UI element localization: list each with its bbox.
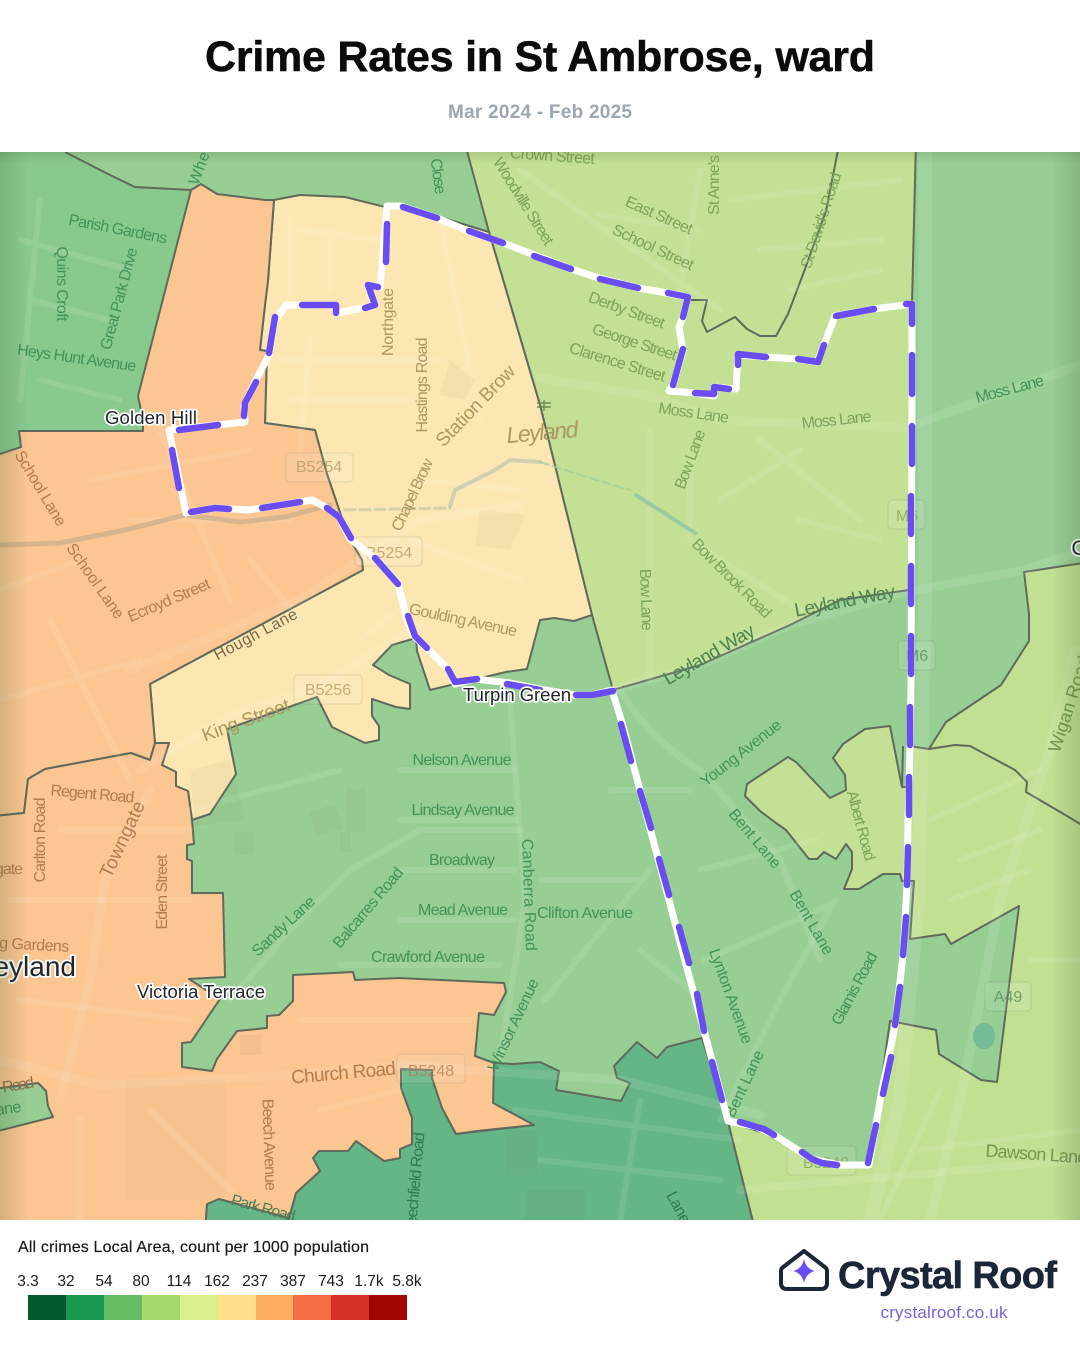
street labels: Station Brow	[432, 361, 520, 451]
street labels: g Gardens	[0, 935, 70, 956]
street labels: Park Road	[229, 1192, 297, 1225]
street labels: Canberra Road	[518, 839, 539, 951]
street labels: Leyland	[505, 416, 580, 448]
zone: Albert Road light green	[745, 726, 909, 889]
street labels: Moss Lane	[974, 372, 1046, 407]
street labels: Eden Street	[154, 854, 171, 930]
street labels: Parish Gardens	[67, 212, 169, 247]
zone: north-west darker green	[0, 140, 191, 456]
street labels: Road	[1, 1074, 35, 1097]
boundary: M6 stub beside Albert Road	[902, 746, 903, 787]
street labels: Nelson Avenue	[412, 752, 512, 769]
street labels: Crawford Avenue	[371, 949, 485, 966]
zone: north orange	[0, 184, 363, 816]
road shields: B5248	[803, 1155, 849, 1172]
legend values: 3.3	[17, 1273, 39, 1290]
place label: Golden Hill: Golden Hill	[105, 407, 197, 428]
boundary: Wigan Road	[929, 745, 1080, 825]
legend values: 1.7k	[354, 1273, 384, 1290]
legend title: All crimes Local Area, count per 1000 population	[18, 1239, 369, 1256]
street labels: Mead Avenue	[418, 902, 508, 919]
street labels: King Street	[199, 695, 294, 746]
street labels: Quins Croft	[53, 246, 70, 322]
zone: south orange	[0, 743, 534, 1230]
street labels: Bow Lane	[636, 569, 655, 631]
route outline: ward boundary white casing	[169, 206, 912, 1165]
street labels: Beech Avenue	[258, 1099, 279, 1191]
street labels: Heys Hunt Avenue	[16, 342, 137, 375]
street labels: Moss Lane	[801, 408, 872, 433]
street labels: Clarence Street	[567, 340, 668, 386]
logo: Crystal Roof	[781, 1251, 1057, 1322]
map base: mid green zone	[0, 152, 1080, 1220]
legend values: 32	[57, 1273, 75, 1290]
street labels: Goulding Avenue	[407, 601, 519, 640]
legend values: 114	[167, 1273, 192, 1290]
street labels: Winsor Avenue	[485, 976, 543, 1074]
road network	[0, 152, 1080, 1220]
legend values: 54	[95, 1273, 113, 1290]
street labels: Albert Road	[843, 789, 878, 863]
road shields: B5254	[296, 459, 342, 476]
legend values	[17, 1273, 422, 1290]
street labels: Moss Lane	[657, 400, 730, 427]
street labels: Bent Lane	[786, 887, 836, 958]
street labels: St Anne's	[706, 155, 723, 215]
road shields: B5248	[408, 1063, 454, 1080]
icon: house with star	[781, 1251, 827, 1289]
zone: south dark green	[205, 1038, 755, 1230]
place label: Turpin Green: Turpin Green	[463, 684, 571, 705]
street labels: Chapel Brow	[389, 456, 437, 534]
zone: central yellow	[150, 195, 592, 820]
street labels: Clifton Avenue	[537, 905, 633, 922]
building blocks	[125, 360, 585, 1220]
street labels: St David's Road	[798, 170, 845, 271]
legend values: 5.8k	[392, 1273, 422, 1290]
legend colour scale	[28, 1295, 407, 1320]
street labels: Crown Street	[509, 145, 596, 168]
street labels: Lane	[662, 1189, 694, 1227]
road shields: B5256	[305, 682, 351, 699]
street labels: Young Avenue	[697, 717, 785, 790]
street labels: Sandy Lane	[249, 893, 319, 960]
street labels: School Lane	[11, 448, 69, 530]
street labels: Glamis Road	[829, 950, 881, 1028]
place label: Victoria Terrace: Victoria Terrace	[137, 981, 265, 1002]
boundary: north-west ward top	[65, 152, 191, 190]
legend values: 743	[318, 1273, 344, 1290]
title: Crime Rates in St Ambrose, ward	[205, 33, 875, 81]
boundary: St David's Road	[688, 150, 838, 336]
street labels: Beechfield Road	[403, 1132, 428, 1236]
street labels: Great Park Drive	[98, 246, 141, 352]
website url: crystalroof.co.uk	[880, 1303, 1008, 1322]
street labels: Church Road	[290, 1058, 397, 1089]
legend values: 80	[132, 1273, 150, 1290]
street labels: Bow Brook Road	[688, 536, 774, 622]
route dashes: purple ward boundary	[172, 207, 912, 1165]
street labels: East Street	[622, 193, 696, 239]
road shields: M6	[906, 648, 928, 665]
street labels: George Street	[590, 321, 679, 365]
street labels: Ecroyd Street	[125, 576, 214, 626]
street labels: Leyland Way	[660, 620, 759, 690]
road shields: A49	[994, 989, 1022, 1006]
street labels: Carlton Road	[32, 798, 49, 882]
street labels: Woodville Street	[489, 155, 557, 249]
legend	[17, 1239, 422, 1320]
street labels: Bent Lane	[725, 806, 784, 872]
street labels: Broadway	[429, 852, 495, 869]
road shields: B5254	[366, 545, 412, 562]
legend values: 387	[280, 1273, 306, 1290]
street labels: Whe	[186, 149, 214, 187]
pond	[973, 1023, 995, 1049]
legend values: 237	[242, 1273, 268, 1290]
street labels: School Lane	[62, 541, 127, 622]
subtitle: date range: Mar 2024 - Feb 2025	[448, 102, 632, 123]
street labels: Leyland Way	[793, 581, 898, 622]
street labels: Lindsay Avenue	[412, 802, 515, 819]
street labels: Close	[427, 157, 448, 195]
map edge vignette	[0, 152, 1080, 1220]
street labels: Northgate	[380, 288, 397, 356]
legend values: 162	[204, 1273, 230, 1290]
zone: north-east light green	[464, 140, 916, 690]
street labels: School Street	[609, 222, 697, 274]
street labels: Derby Street	[586, 289, 668, 333]
street labels: Hastings Road	[414, 338, 431, 432]
waterway: river channel	[0, 460, 695, 545]
street labels: Towngate	[96, 798, 150, 881]
street labels: Bow Lane	[672, 427, 709, 491]
street labels: Bent Lane	[722, 1048, 768, 1120]
rail station glyph	[537, 400, 551, 411]
zone: east wedge light green	[728, 562, 1080, 1230]
logo wordmark: Crystal Roof	[838, 1255, 1057, 1297]
street labels: Lynton Avenue	[705, 947, 755, 1046]
road shields	[286, 453, 1031, 1175]
street labels: Regent Road	[50, 782, 135, 807]
street labels: Balcarres Road	[330, 864, 407, 952]
street labels: Hough Lane	[211, 606, 301, 664]
road shields: M6	[896, 508, 918, 525]
